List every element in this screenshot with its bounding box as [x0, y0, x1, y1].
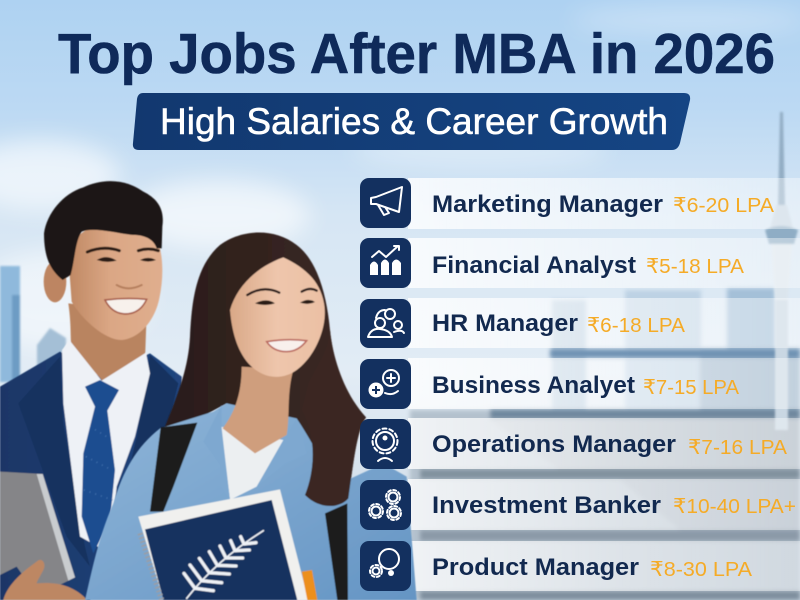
job row: Marketing Manager: [360, 178, 774, 228]
title: Top Jobs After MBA in 2026: [58, 22, 775, 86]
salary: ₹6-20 LPA: [673, 194, 774, 217]
man neck: [68, 303, 147, 382]
woman hair: [165, 232, 366, 506]
salary: ₹5-18 LPA: [646, 255, 744, 278]
job row: Financial Analyst: [360, 238, 744, 288]
icon: gear and ring: [360, 541, 411, 591]
woman brows: [247, 289, 317, 295]
man suit: [0, 352, 182, 600]
list rows background bands: [408, 178, 800, 591]
salary: ₹7-15 LPA: [643, 376, 739, 399]
man: [0, 181, 182, 600]
job row: Operations Manager: [360, 419, 787, 469]
man lapels: [18, 355, 178, 567]
job title: Investment Banker: [432, 492, 661, 519]
job title: Financial Analyst: [432, 252, 636, 279]
man brows: [87, 248, 158, 252]
landmark: sky tower: [765, 112, 798, 430]
woman eyes: [255, 300, 315, 305]
woman face: [230, 257, 325, 377]
man hair: [44, 181, 163, 280]
subtitle text: High Salaries & Career Growth: [160, 101, 668, 142]
salary: ₹10-40 LPA+: [673, 495, 796, 518]
woman collar: [203, 405, 307, 500]
job title: Marketing Manager: [432, 191, 663, 218]
subtitle banner: [133, 93, 690, 150]
woman straps: [150, 423, 348, 600]
job row: Business Analyet: [360, 359, 739, 409]
job title: Operations Manager: [432, 431, 676, 458]
notebook spiral: [140, 533, 162, 600]
icon: people: [360, 299, 411, 348]
man shirt: [62, 340, 150, 553]
notebook fern: [184, 531, 263, 598]
man eyes: [97, 257, 156, 262]
man nose: [117, 285, 142, 288]
woman: [85, 232, 417, 600]
job row: Product Manager: [360, 541, 752, 591]
job title: Business Analyet: [432, 372, 635, 399]
woman neck: [223, 367, 293, 453]
woman smile: [267, 340, 307, 352]
man face: [68, 227, 162, 340]
icon: bar chart with trend: [360, 238, 411, 288]
job row: HR Manager: [360, 299, 685, 348]
background: clouds: [0, 6, 800, 350]
notebook cover: [138, 489, 308, 600]
banner shape: [133, 93, 690, 150]
icon: gear with person: [360, 419, 411, 469]
salary: ₹6-18 LPA: [587, 314, 685, 337]
salary: ₹7-16 LPA: [688, 436, 787, 459]
woman hair front right: [302, 330, 366, 506]
job title: Product Manager: [432, 554, 639, 581]
background: left skyline: [0, 266, 66, 382]
man tie: [82, 380, 119, 553]
job row: Investment Banker: [360, 480, 796, 530]
man ear: [44, 261, 66, 302]
orange tab: [302, 570, 317, 600]
woman jacket: [85, 403, 417, 600]
job title: HR Manager: [432, 310, 578, 337]
man hand: [3, 560, 87, 600]
tablet: [0, 472, 75, 596]
icon: three gears: [360, 480, 411, 530]
background: right skyline: [410, 288, 800, 600]
icon: plus circles: [360, 359, 411, 409]
woman t-shirt: [221, 427, 283, 500]
photo: two graduates: [0, 181, 417, 600]
icon: megaphone: [360, 178, 411, 228]
man smile: [105, 298, 147, 314]
salary: ₹8-30 LPA: [650, 558, 752, 581]
